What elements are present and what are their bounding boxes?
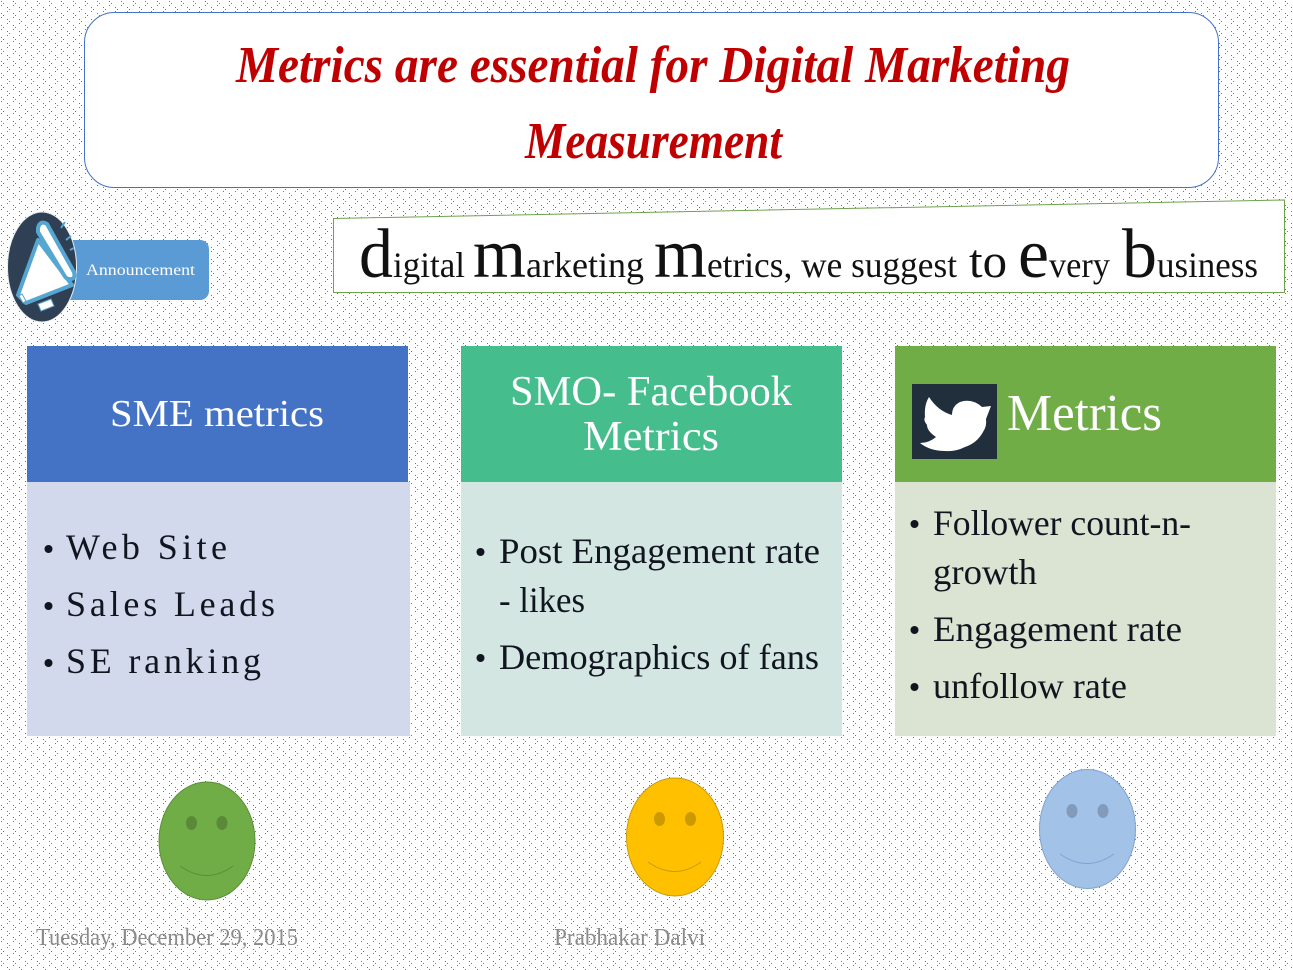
icon: twitter bird	[912, 384, 997, 459]
subtitle text: e	[1018, 216, 1049, 293]
panel heading: SME metrics	[110, 393, 324, 435]
panel heading: Metrics	[1007, 385, 1162, 442]
bullet list: SE ranking	[66, 641, 261, 681]
panel body	[27, 482, 410, 736]
subtitle text: m	[473, 216, 526, 293]
subtitle text	[359, 216, 1258, 293]
subtitle ribbon	[334, 200, 1284, 293]
announcement badge	[8, 212, 209, 322]
icon: blue smiley	[1040, 770, 1136, 888]
bullet list: - likes	[499, 580, 585, 620]
bullet list: Web Site	[66, 527, 227, 567]
subtitle text: very	[1049, 245, 1110, 285]
subtitle text: to	[969, 235, 1007, 288]
icon: green smiley	[159, 782, 255, 900]
subtitle text: etrics, we suggest	[707, 245, 957, 285]
bullet list: Sales Leads	[66, 584, 275, 624]
bullet list	[910, 503, 1191, 706]
bullet list	[476, 531, 820, 677]
title panel	[84, 12, 1218, 188]
panel body	[461, 482, 842, 736]
title: Metrics are essential for Digital Marketing	[235, 37, 1070, 94]
subtitle text: b	[1122, 216, 1157, 293]
bullet list: growth	[933, 552, 1037, 592]
panel heading	[461, 346, 842, 482]
panel heading: SMO- Facebook	[510, 369, 792, 415]
panel: Twitter metrics	[895, 346, 1276, 736]
bullet list: Post Engagement rate	[499, 531, 820, 571]
footer author: Prabhakar Dalvi	[554, 925, 705, 951]
announcement badge: Announcement	[86, 262, 196, 279]
bullet list	[44, 527, 275, 681]
title	[235, 37, 1070, 170]
footer date: Tuesday, December 29, 2015	[36, 925, 298, 951]
panel: SME metrics	[27, 346, 410, 736]
subtitle text: arketing	[526, 245, 644, 285]
subtitle text: usiness	[1157, 245, 1258, 285]
title: Measurement	[524, 113, 783, 170]
panel heading	[895, 346, 1276, 482]
bullet list: Follower count-n-	[933, 503, 1191, 543]
bullet list: unfollow rate	[933, 666, 1127, 706]
icon: megaphone	[8, 212, 76, 322]
panel body	[895, 482, 1276, 736]
bullet list: Engagement rate	[933, 609, 1182, 649]
subtitle text: d	[359, 216, 393, 293]
subtitle text: igital	[393, 245, 465, 285]
panel heading: Metrics	[583, 414, 719, 460]
subtitle text: m	[654, 216, 707, 293]
panel heading	[27, 346, 408, 482]
icon: yellow smiley	[626, 778, 724, 896]
panel: SMO Facebook metrics	[461, 346, 842, 736]
bullet list: Demographics of fans	[499, 637, 819, 677]
